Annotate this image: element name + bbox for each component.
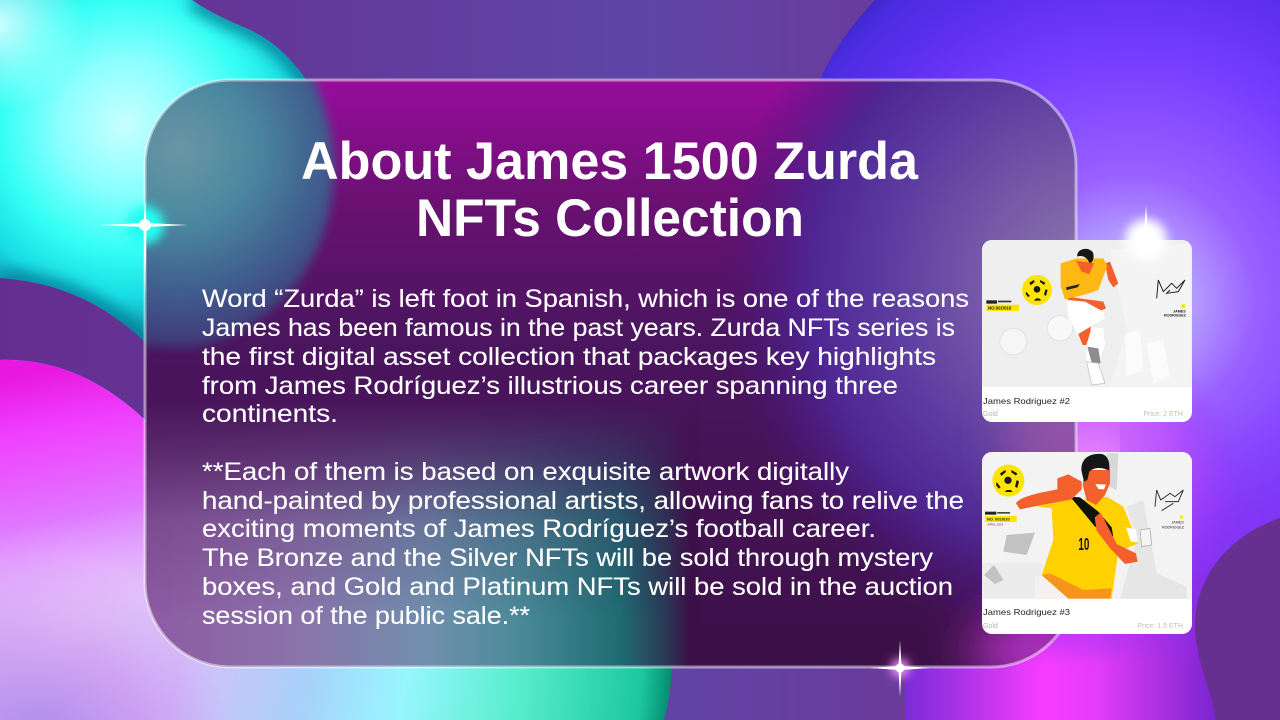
- paragraph: artwork and sale: [202, 458, 964, 630]
- panel tint: magenta bottom right: [944, 594, 1058, 667]
- title: [301, 132, 919, 248]
- panel tint: pale bottom left: [145, 412, 700, 667]
- artwork: celebrating player: [982, 453, 1187, 599]
- artwork: celebrating player: JAMES: [1171, 520, 1184, 524]
- artwork: celebrating player: 10: [1078, 534, 1089, 554]
- panel tint: teal top left: [145, 80, 340, 351]
- card caption: Price: 1.5 ETH: [1137, 623, 1183, 630]
- NFT card: James Rodriguez #3: [982, 452, 1192, 634]
- card caption: James Rodriguez #2: [983, 397, 1071, 406]
- card caption: Gold: [983, 623, 998, 630]
- artwork: celebrating player: APRIL 2014: [987, 523, 1004, 527]
- card caption: Price: 2 ETH: [1143, 411, 1183, 418]
- paragraph: artwork and sale: **Each of them is based on exquisite artwork digitally: [202, 458, 850, 486]
- panel tint: violet top right: [744, 80, 1076, 615]
- sparkle: white top right: [1125, 205, 1167, 261]
- paragraph: artwork and sale: session of the public sale.**: [202, 602, 530, 630]
- sparkle: pink bottom: [870, 640, 930, 697]
- artwork: celebrating player: NO. 002/010: [987, 516, 1010, 521]
- paragraph: artwork and sale: boxes, and Gold and Platinum NFTs will be sold in the auction: [202, 573, 953, 601]
- card caption: Gold: [983, 411, 998, 418]
- card caption: [983, 608, 1183, 630]
- paragraph: artwork and sale: The Bronze and the Silver NFTs will be sold through mystery: [202, 544, 934, 572]
- paragraph: artwork and sale: hand-painted by professional artists, allowing fans to relive the: [202, 487, 964, 515]
- artwork: kicking player: JAMES: [1173, 309, 1186, 313]
- title: About James 1500 Zurda: [301, 132, 919, 191]
- paragraph: about Zurda: the first digital asset collection that packages key highlights: [202, 343, 936, 371]
- panel tint: light right side: [986, 422, 1076, 453]
- paragraph: artwork and sale: exciting moments of James Rodríguez’s football career.: [202, 515, 876, 543]
- artwork: celebrating player: RODRIGUEZ: [1162, 525, 1185, 529]
- NFT card: James Rodriguez #2: [982, 240, 1192, 422]
- artwork: kicking player: NO.001/010: [988, 305, 1012, 310]
- artwork: kicking player: [986, 243, 1192, 387]
- paragraph: about Zurda: from James Rodríguez’s illustrious career spanning three: [202, 372, 898, 400]
- body text: [202, 285, 969, 630]
- blob: cyan top left: [0, 0, 330, 342]
- paragraph: about Zurda: [202, 285, 969, 428]
- panel: glass card: [144, 78, 1078, 668]
- card caption: James Rodriguez #3: [983, 608, 1071, 617]
- title: NFTs Collection: [416, 189, 804, 248]
- paragraph: about Zurda: James has been famous in the past years. Zurda NFTs series is: [202, 314, 955, 342]
- paragraph: about Zurda: continents.: [202, 400, 338, 428]
- blob: violet top right: [800, 0, 1280, 720]
- blob: purple bottom right: [1195, 518, 1280, 720]
- card caption: [983, 397, 1183, 418]
- blob: magenta bottom right: [905, 591, 1216, 720]
- blob: magenta to green bottom left: [0, 360, 680, 720]
- paragraph: about Zurda: Word “Zurda” is left foot in Spanish, which is one of the reasons: [202, 285, 969, 313]
- artwork: kicking player: RODRIGUEZ: [1164, 314, 1187, 318]
- sparkle: cyan left: [100, 200, 188, 296]
